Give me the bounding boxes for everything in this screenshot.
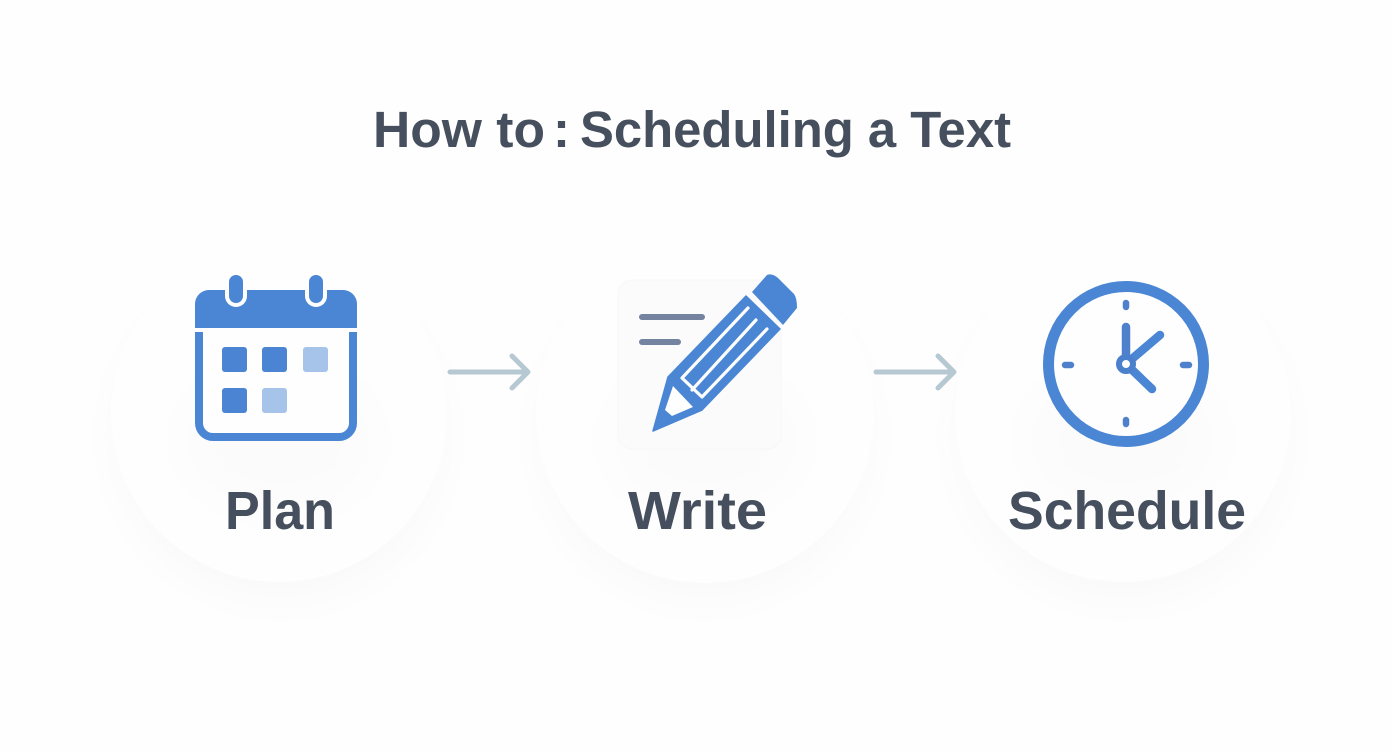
arrow: plan to write: [450, 356, 528, 388]
icon: clock: [1048, 286, 1204, 442]
panel: plan: [195, 272, 357, 541]
icon: pencil and note: [618, 274, 797, 449]
label: schedule: Schedule: [1008, 481, 1246, 541]
panel: write: [618, 274, 797, 541]
title: [373, 101, 1011, 158]
arrow: write to schedule: [876, 356, 954, 388]
write background circle: [535, 245, 875, 606]
schedule background circle: [953, 246, 1293, 606]
plan background circle: [109, 246, 449, 606]
panel: schedule: [1008, 286, 1246, 541]
title: :: [553, 101, 570, 158]
background circles: [109, 245, 1293, 606]
label: plan: Plan: [225, 481, 335, 541]
title: How to: [373, 101, 545, 158]
icon: calendar: [195, 272, 357, 437]
label: write: Write: [628, 481, 767, 541]
title: Scheduling a Text: [580, 101, 1011, 158]
